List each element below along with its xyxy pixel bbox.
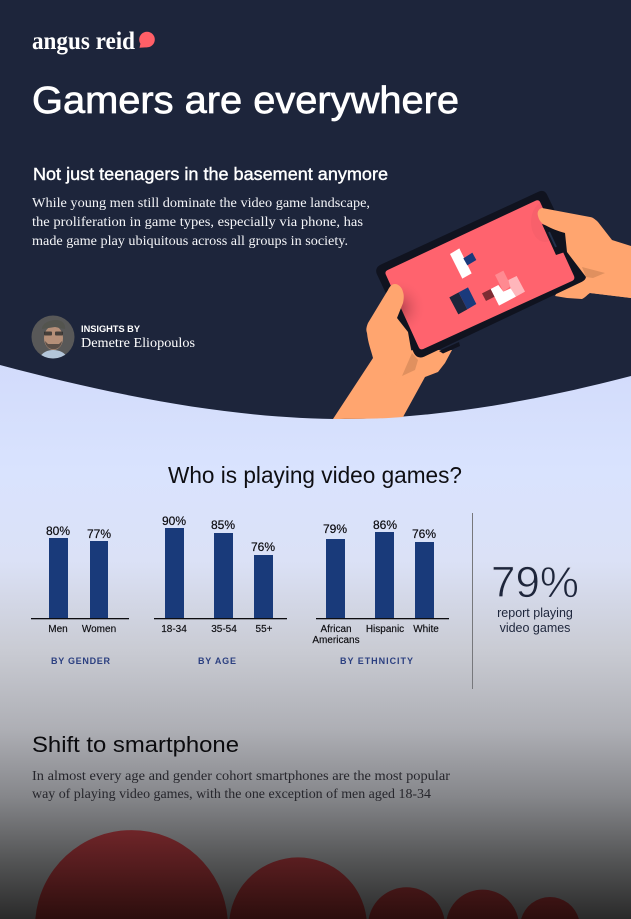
right palm behind phone [555,250,631,299]
subheading: Not just teenagers in the basement anymore [33,164,388,184]
callout: 79 percent: video games [500,621,570,635]
left hand shadow [402,353,418,376]
bar chart: by age: 85% [211,518,235,532]
illustration: hands holding phone [333,191,631,419]
phone notch [542,224,568,255]
bar chart: by ethnicity: 86% [373,518,397,532]
bar chart: by ethnicity: 76% [412,527,436,541]
bar chart: by gender: 77% [87,527,111,541]
screen shadow near right thumb [531,202,559,242]
bar chart: by gender: 80% [46,524,70,538]
bar chart: by ethnicity: White [413,624,439,635]
right thumb and hand [538,208,631,298]
bar chart: by age: 35-54 [211,624,237,635]
phone body [376,191,586,357]
screen shadow near thumb [401,289,418,326]
logo: angus reid [32,28,135,55]
chart heading: Who is playing video games? [168,462,462,488]
game pixels [449,248,525,314]
section paragraph: way of playing video games, with the one exception of men aged 18-34 [32,787,431,802]
author credit: INSIGHTS BY [81,324,140,334]
callout: 79 percent [491,558,579,635]
callout: 79 percent: 79% [491,558,579,607]
bar chart: by gender: Men [48,624,68,635]
divider [472,513,473,689]
bar chart: by ethnicity: Hispanic [366,624,404,635]
bar chart: by age: 18-34 [161,624,187,635]
bar chart: by gender: BY GENDER [51,656,110,666]
intro paragraph: the proliferation in game types, especially via phone, has [32,215,363,230]
phone screen [385,200,574,349]
callout: 79 percent: report playing [497,606,573,620]
left thumb and hand [366,284,412,385]
section paragraph [32,769,450,802]
author credit: Demetre Eliopoulos [81,336,195,351]
intro paragraph: made game play ubiquitous across all groups in society. [32,234,348,249]
title: Gamers are everywhere [32,80,459,122]
bar chart: by age: BY AGE [198,656,236,666]
intro paragraph [32,196,370,249]
bubble chart [35,830,579,919]
bar chart: by age [154,514,287,666]
left palm behind phone [333,350,452,419]
section paragraph: In almost every age and gender cohort smartphones are the most popular [32,769,450,784]
bar chart: by age: 55+ [256,624,273,635]
bar chart: by gender: Women [82,624,116,635]
intro paragraph: While young men still dominate the video game landscape, [32,196,370,211]
bar chart: by ethnicity: African [320,624,352,635]
author credit [81,324,195,351]
phone side button [439,342,460,354]
bar chart: by ethnicity: 79% [323,522,347,536]
right hand shadow [582,267,605,278]
header panel [0,0,631,419]
bar chart: by ethnicity: Americans [312,635,360,646]
bar chart: by gender [31,524,129,666]
bar chart: by ethnicity [312,518,449,666]
bar chart: by ethnicity: BY ETHNICITY [340,656,413,666]
bar chart: by age: 76% [251,540,275,554]
section heading: Shift to smartphone [32,732,239,757]
bar chart: by age: 90% [162,514,186,528]
author avatar [32,316,74,362]
